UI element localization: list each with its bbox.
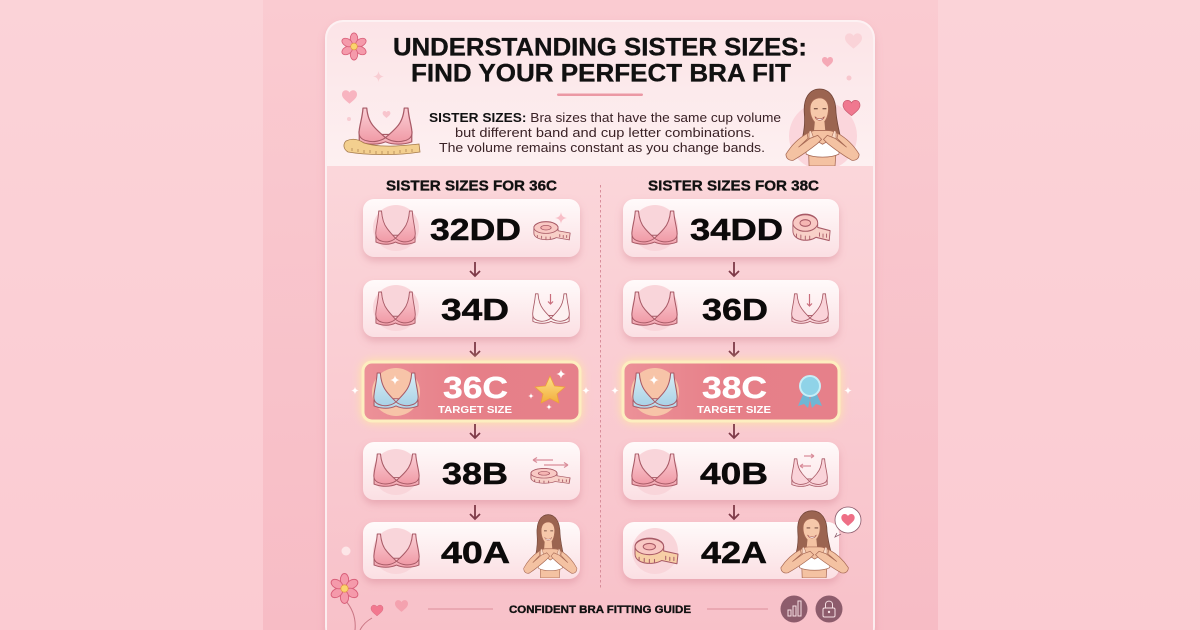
footer text: CONFIDENT BRA FITTING GUIDE <box>509 604 691 616</box>
size card: 38B <box>363 442 580 500</box>
arrow <box>729 424 739 438</box>
column: sister sizes for 38C <box>611 178 861 579</box>
size card: 40B: 40B <box>700 456 768 491</box>
icon: blue rosette <box>798 376 822 408</box>
icon: woman with tape <box>781 511 848 578</box>
definition text: SISTER SIZES: Bra sizes that have the same cup volume <box>429 111 781 125</box>
size card: 36C target <box>351 362 590 421</box>
size card: 42A <box>623 507 861 579</box>
arrow <box>729 262 739 276</box>
size card: 38C target: TARGET SIZE <box>697 404 771 416</box>
arrow <box>729 505 739 519</box>
arrow <box>470 505 480 519</box>
size card: 34DD <box>623 199 839 257</box>
icon: lock badge <box>816 596 842 622</box>
panel: lower chart area <box>327 166 873 630</box>
title: UNDERSTANDING SISTER SIZES: <box>393 34 807 62</box>
arrow <box>470 342 480 356</box>
divider <box>600 185 602 590</box>
title underline <box>557 94 643 96</box>
icon: bar chart badge <box>780 596 808 622</box>
icon: bra with measuring tape <box>344 108 420 155</box>
size card: 36D: 36D <box>702 292 768 327</box>
definition text <box>429 111 781 155</box>
arrow <box>470 262 480 276</box>
size card: 38C target <box>611 362 852 421</box>
arrow <box>729 342 739 356</box>
size card: 36C target: TARGET SIZE <box>438 404 512 416</box>
size card: 40A <box>363 515 580 579</box>
size card: 34DD: 34DD <box>690 212 783 247</box>
panel: header <box>327 22 873 166</box>
size card: 40A: 40A <box>441 535 510 570</box>
icon: heart speech bubble <box>835 507 861 537</box>
size card: 34D: 34D <box>441 292 509 327</box>
icon: woman measuring <box>786 89 860 166</box>
footer <box>428 596 842 622</box>
column heading: SISTER SIZES FOR 36C <box>386 178 558 194</box>
definition text: The volume remains constant as you change bands. <box>439 141 765 155</box>
column: sister sizes for 36C <box>351 178 590 579</box>
icon: woman fitting bra <box>524 515 577 578</box>
column heading: SISTER SIZES FOR 38C <box>648 178 820 194</box>
size card: 38B: 38B <box>442 456 508 491</box>
decorative hearts and sparkles <box>342 33 862 121</box>
size card: 36C target: 36C <box>443 370 508 405</box>
arrow <box>470 424 480 438</box>
size card: 42A: 42A <box>701 535 767 570</box>
definition text: but different band and cup letter combinations. <box>455 126 755 140</box>
decorative flower stems and hearts <box>329 546 408 630</box>
title: FIND YOUR PERFECT BRA FIT <box>411 60 791 88</box>
title <box>393 34 807 88</box>
size card: 32DD <box>363 199 580 257</box>
size card: 34D <box>363 280 580 337</box>
icon: header flower <box>340 33 368 60</box>
size card: 40B <box>623 442 839 500</box>
size card: 32DD: 32DD <box>430 212 521 247</box>
panel: infographic card <box>325 20 875 630</box>
size card: 38C target: 38C <box>702 370 767 405</box>
size card: 36D <box>623 280 839 337</box>
